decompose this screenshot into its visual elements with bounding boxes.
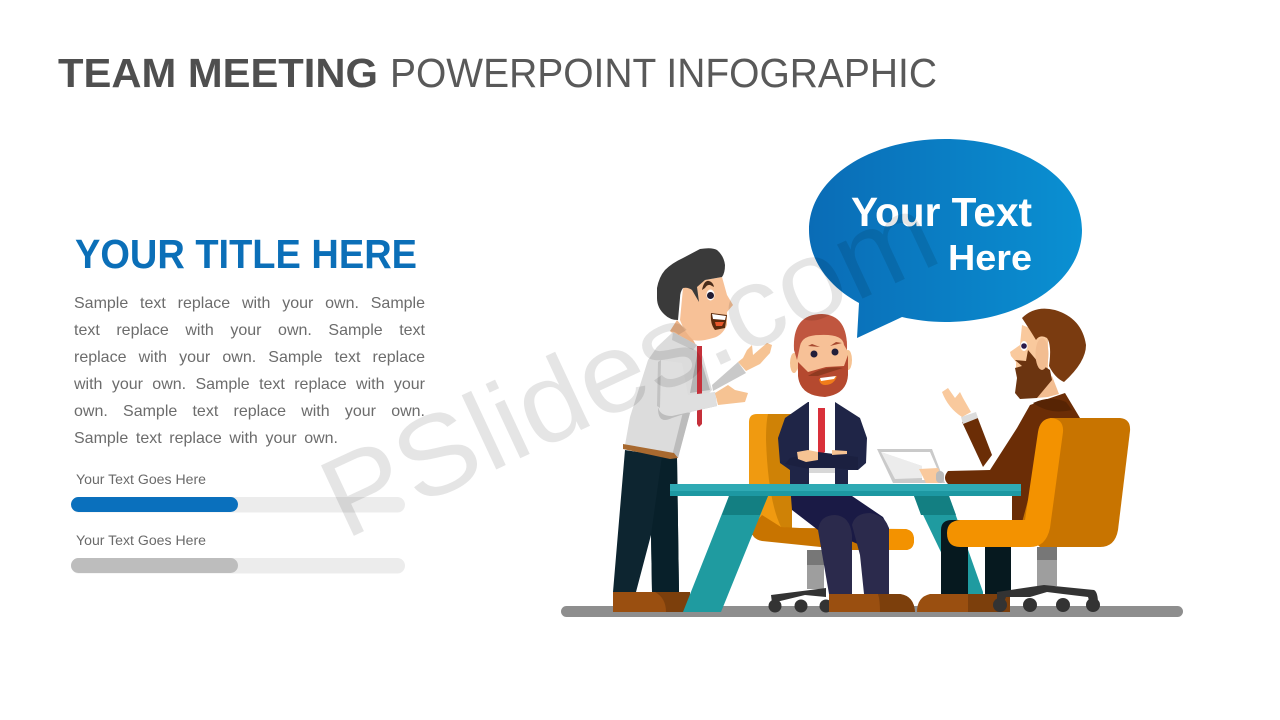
ears bbox=[790, 350, 852, 373]
progress bar 1 bbox=[71, 497, 405, 512]
person: right man upper body bbox=[877, 309, 1086, 522]
body text block: own. Sample text replace with your own. bbox=[74, 403, 425, 420]
title: POWERPOINT INFOGRAPHIC bbox=[390, 50, 937, 96]
beard bbox=[798, 355, 848, 397]
belt bbox=[623, 444, 678, 459]
head bbox=[680, 277, 733, 341]
hair bbox=[794, 314, 847, 360]
back arm bbox=[712, 343, 772, 391]
progress bars bbox=[71, 472, 405, 574]
suit lower body and legs bbox=[790, 484, 889, 594]
watermark: PSlides.com bbox=[302, 168, 955, 562]
title: TEAM MEETING bbox=[58, 50, 378, 96]
eye bbox=[1020, 341, 1028, 351]
table leg: left bbox=[683, 496, 768, 612]
trousers bbox=[613, 450, 679, 592]
suit jacket bbox=[778, 402, 867, 484]
chair: right bbox=[947, 418, 1130, 612]
shoes bbox=[613, 592, 690, 612]
body text block bbox=[74, 295, 425, 447]
shirt shading bbox=[672, 332, 710, 458]
body text block: Sample text replace with your own. bbox=[74, 430, 338, 447]
face bbox=[1010, 325, 1048, 372]
body text block: text replace with your own. Sample text bbox=[74, 322, 425, 339]
hair bbox=[657, 248, 725, 320]
speech bubble: Here bbox=[948, 237, 1032, 278]
chair: middle bbox=[749, 414, 914, 612]
trousers bbox=[941, 520, 1011, 595]
hair bbox=[1022, 309, 1086, 382]
floor bbox=[561, 606, 1183, 617]
shoes bbox=[829, 594, 915, 612]
illustration: team meeting bbox=[561, 139, 1183, 617]
progress label 2: Your Text Goes Here bbox=[76, 533, 206, 548]
coat bbox=[945, 393, 1080, 522]
body text block: with your own. Sample text replace with your bbox=[74, 376, 425, 393]
laptop bbox=[877, 449, 945, 483]
person: seated man in suit bbox=[778, 314, 915, 612]
shirt bbox=[809, 402, 835, 484]
progress label 1: Your Text Goes Here bbox=[76, 472, 206, 487]
speech bubble: Your Text bbox=[851, 189, 1032, 235]
front arm bbox=[657, 360, 748, 420]
shirt bbox=[625, 332, 712, 458]
tie bbox=[697, 346, 702, 427]
heading: your title here: YOUR TITLE HERE bbox=[75, 231, 417, 277]
face details bbox=[702, 281, 727, 330]
tie bbox=[818, 408, 825, 455]
progress bar 2 bbox=[71, 558, 405, 574]
beard bbox=[1015, 350, 1052, 399]
person: right man legs bbox=[914, 496, 1011, 612]
neck bbox=[670, 320, 696, 345]
lower hand bbox=[919, 468, 944, 483]
raised arm bbox=[942, 388, 992, 467]
speech bubble bbox=[809, 139, 1082, 338]
right table leg bbox=[914, 496, 983, 600]
laptop screen bbox=[881, 452, 942, 480]
face bbox=[797, 330, 847, 380]
title bbox=[58, 50, 937, 96]
body text block: replace with your own. Sample text replace bbox=[74, 349, 425, 366]
crossed arms bbox=[780, 450, 858, 473]
shoes bbox=[917, 594, 1010, 612]
right table leg shade bbox=[914, 496, 956, 515]
ear bbox=[1036, 338, 1048, 370]
table top bbox=[670, 484, 1021, 496]
person: standing man bbox=[613, 248, 772, 612]
body text block: Sample text replace with your own. Sample bbox=[74, 295, 425, 312]
coat collar shade bbox=[1033, 399, 1072, 411]
neck bbox=[1036, 376, 1059, 398]
face details bbox=[808, 342, 843, 385]
